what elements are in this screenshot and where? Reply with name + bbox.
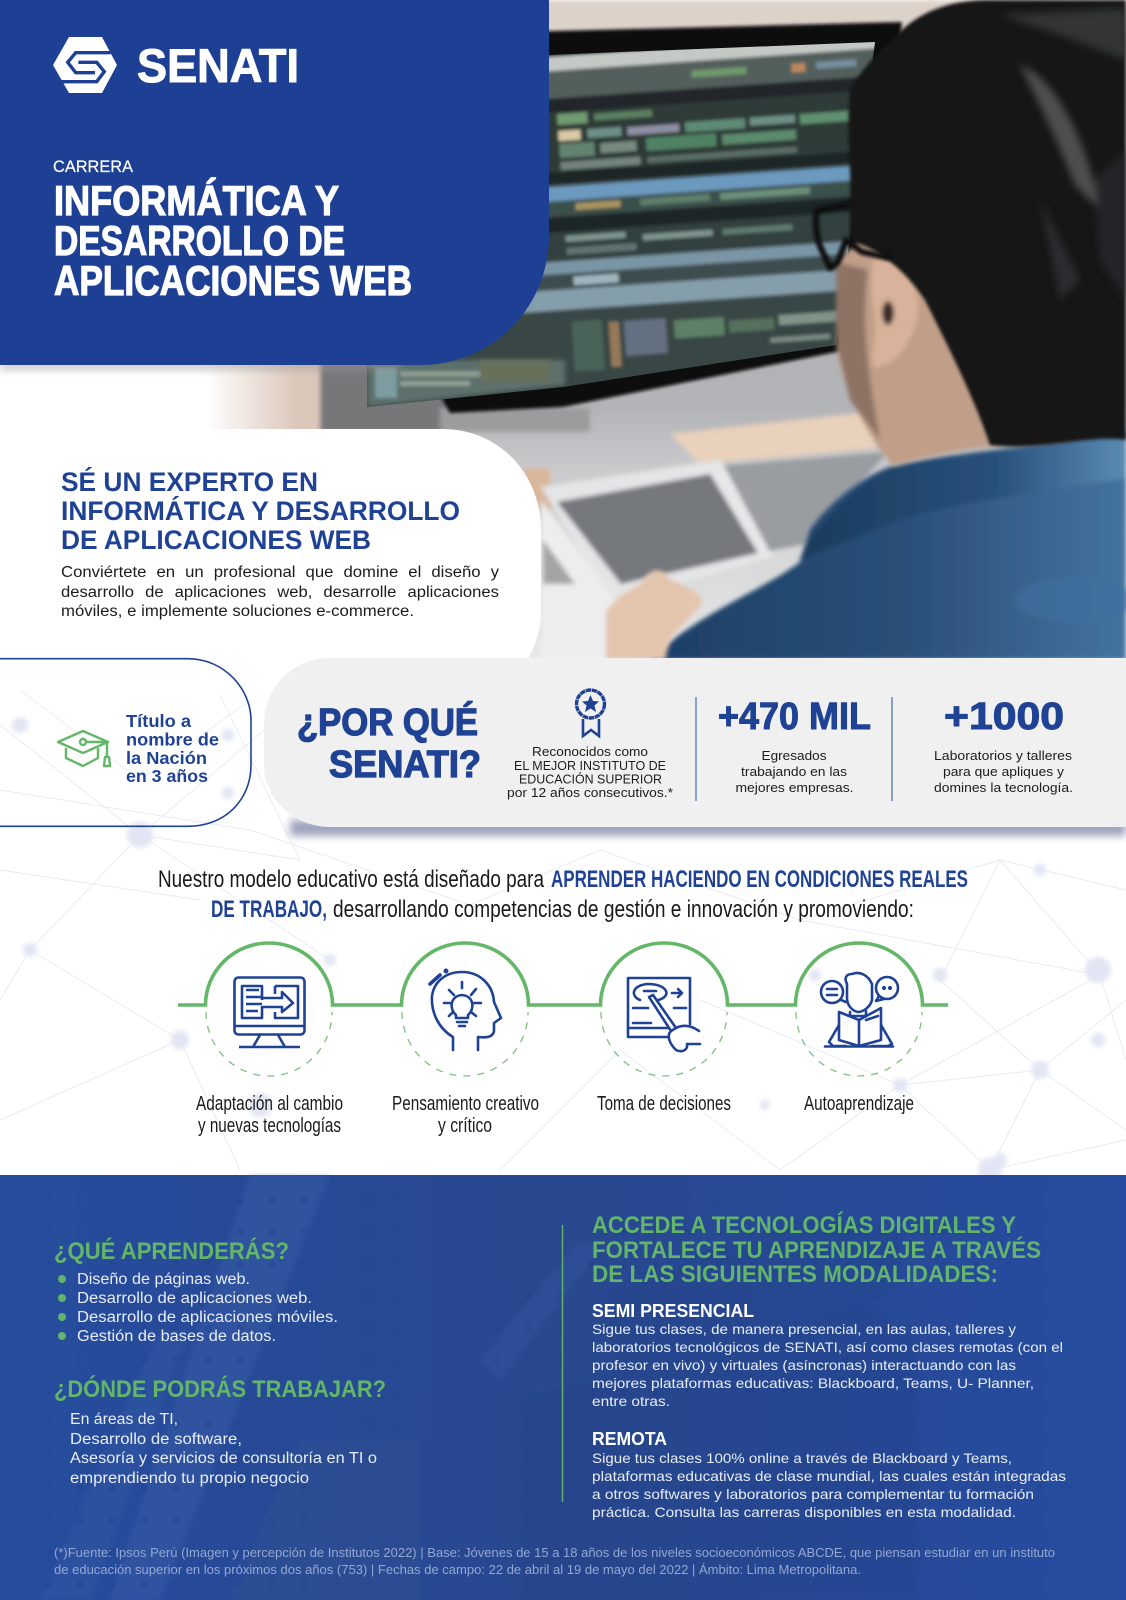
- credential text: la Nación: [126, 748, 207, 768]
- why heading: [297, 700, 481, 786]
- title: APLICACIONES WEB: [54, 257, 412, 304]
- modality: remota: [592, 1429, 1066, 1520]
- stat: labs: domines la tecnología.: [934, 780, 1073, 795]
- competency labels: Pensamiento creativo: [392, 1093, 539, 1115]
- modality: remota: plataformas educativas de clase mundial, las cuales están integradas: [592, 1468, 1066, 1484]
- intro paragraph: desarrollo de aplicaciones web, desarrolle aplicaciones: [61, 584, 499, 601]
- stat: graduates: mejores empresas.: [736, 780, 854, 795]
- stat: graduates: Egresados: [762, 748, 827, 763]
- intro paragraph: Conviértete en un profesional que domine el diseño y: [61, 564, 499, 581]
- intro paragraph: móviles, e implemente soluciones e-commerce.: [61, 603, 414, 620]
- modality: semi presencial: SEMI PRESENCIAL: [592, 1301, 754, 1321]
- list: what you learn: Gestión de bases de datos.: [77, 1328, 276, 1345]
- icon: graduation cap: [58, 731, 110, 766]
- logo: SENATI: [53, 37, 299, 93]
- heading: what you learn: ¿QUÉ APRENDERÁS?: [54, 1237, 289, 1265]
- heading: modalities: DE LAS SIGUIENTES MODALIDADES:: [592, 1261, 998, 1288]
- modality: semi presencial: [592, 1301, 1063, 1409]
- competency labels: y nuevas tecnologías: [198, 1115, 341, 1137]
- educational model text: [158, 866, 968, 923]
- label: carrera: CARRERA: [53, 157, 134, 176]
- footnote: [54, 1546, 1055, 1577]
- credential text: Título a: [126, 711, 191, 731]
- stat: best institute: EDUCACIÓN SUPERIOR: [519, 772, 662, 786]
- man's hair: [849, 0, 1126, 447]
- modality: remota: a otros softwares y laboratorios para complementar tu formación: [592, 1486, 1034, 1502]
- logo: SENATI: SENATI: [137, 39, 299, 92]
- heading: modalities: [592, 1211, 1041, 1288]
- panel: why senati: [264, 658, 1126, 827]
- stat: graduates: +470 MIL: [718, 696, 871, 738]
- educational model text: desarrollando competencias de gestión e innovación y promoviendo:: [333, 896, 914, 923]
- stat: best institute: [507, 745, 673, 800]
- modality: semi presencial: Sigue tus clases, de manera presencial, en las aulas, talleres y: [592, 1321, 1016, 1337]
- heading: modalities: FORTALECE TU APRENDIZAJE A TRAVÉS: [592, 1236, 1041, 1264]
- competency labels: Adaptación al cambio: [196, 1093, 343, 1115]
- credential text: en 3 años: [126, 766, 208, 786]
- panel: header: [0, 0, 549, 365]
- title: INFORMÁTICA Y: [54, 177, 339, 224]
- footnote: de educación superior en los próximos dos años (753) | Fechas de campo: 22 de abril al 19 de mayo del 2022 | Ámbito: Lima Metropolitana.: [54, 1562, 861, 1577]
- credential text: [126, 711, 219, 786]
- panel: title credential: [0, 659, 251, 826]
- icon: person reading with speech bubbles: [821, 973, 898, 1046]
- text: where you work: [70, 1411, 377, 1487]
- modality: remota: REMOTA: [592, 1429, 667, 1449]
- competency labels: Autoaprendizaje: [804, 1093, 914, 1115]
- footnote: (*)Fuente: Ipsos Perú (Imagen y percepción de Institutos 2022) | Base: Jóvenes de 15 a 18 años de los niveles socioeconómicos ABCDE, que piensan estudiar en un instituto: [54, 1546, 1055, 1560]
- stat: graduates: [718, 696, 871, 795]
- credential text: nombre de: [126, 730, 219, 750]
- intro heading: SÉ UN EXPERTO EN: [61, 466, 318, 497]
- man's neck and face: [836, 240, 1000, 466]
- stat: best institute: EL MEJOR INSTITUTO DE: [514, 759, 666, 773]
- intro heading: DE APLICACIONES WEB: [61, 525, 371, 555]
- modality: semi presencial: mejores plataformas educativas: Blackboard, Teams, U- Planner,: [592, 1375, 1034, 1391]
- text: where you work: Desarrollo de software,: [70, 1431, 242, 1448]
- stat: labs: Laboratorios y talleres: [934, 748, 1073, 763]
- stat: best institute: por 12 años consecutivos.*: [507, 786, 673, 800]
- text: where you work: En áreas de TI,: [70, 1411, 178, 1428]
- why heading: ¿POR QUÉ: [297, 700, 478, 744]
- educational model text: Nuestro modelo educativo está diseñado para: [158, 866, 545, 893]
- icon: medal: [576, 690, 604, 736]
- intro heading: INFORMÁTICA Y DESARROLLO: [61, 495, 460, 526]
- list: what you learn: Diseño de páginas web.: [77, 1271, 250, 1288]
- text: where you work: emprendiendo tu propio negocio: [70, 1470, 309, 1487]
- hero photo: developer at monitor: [200, 0, 1126, 660]
- glasses: [816, 204, 890, 268]
- stat: labs: para que apliques y: [943, 764, 1065, 779]
- list: what you learn: Desarrollo de aplicaciones móviles.: [77, 1309, 338, 1326]
- icon: decision board with pointer: [628, 978, 700, 1051]
- icon: head with lightbulb: [430, 970, 501, 1050]
- modality: semi presencial: entre otras.: [592, 1393, 670, 1409]
- building texture: [40, 1175, 920, 1600]
- stat: labs: [934, 696, 1073, 795]
- list: what you learn: Desarrollo de aplicaciones web.: [77, 1290, 312, 1307]
- heading: where you work: ¿DÓNDE PODRÁS TRABAJAR?: [54, 1375, 386, 1403]
- hand on keyboard: [606, 570, 702, 660]
- modality: semi presencial: profesor en vivo) y virtuales (asíncronas) interactuando con las: [592, 1357, 1016, 1373]
- competency labels: [196, 1093, 914, 1137]
- modality: semi presencial: laboratorios tecnológicos de SENATI, así como clases remotas (con el: [592, 1339, 1063, 1355]
- icon: monitor with arrow: [234, 978, 304, 1047]
- background network pattern: [0, 690, 1126, 1170]
- list: what you learn: [58, 1271, 338, 1345]
- stat: best institute: Reconocidos como: [532, 745, 648, 759]
- header panel shadow: [0, 362, 400, 370]
- title: DESARROLLO DE: [54, 217, 345, 264]
- background network nodes: [12, 717, 1111, 1182]
- modality: remota: práctica. Consulta las carreras disponibles en esta modalidad.: [592, 1504, 1016, 1520]
- competency labels: Toma de decisiones: [597, 1093, 731, 1115]
- educational model text: APRENDER HACIENDO EN CONDICIONES REALES: [551, 866, 968, 893]
- title: [54, 177, 412, 304]
- why panel shadow: [290, 820, 1126, 836]
- monitor frame: [440, 22, 902, 413]
- stat: labs: +1000: [944, 696, 1064, 738]
- text: where you work: Asesoría y servicios de consultoría en TI o: [70, 1450, 377, 1467]
- intro paragraph: [61, 564, 499, 620]
- competency labels: y crítico: [438, 1115, 492, 1137]
- stat: graduates: trabajando en las: [741, 764, 848, 779]
- why heading: SENATI?: [329, 744, 481, 786]
- panel: intro: [0, 429, 541, 660]
- heading: modalities: ACCEDE A TECNOLOGÍAS DIGITALES Y: [592, 1211, 1016, 1239]
- man's shirt: [649, 430, 1126, 660]
- intro heading: [61, 466, 460, 555]
- white fade over left of photo: [206, 360, 296, 440]
- monitor screen with code: [367, 42, 875, 407]
- modality: remota: Sigue tus clases 100% online a través de Blackboard y Teams,: [592, 1450, 1012, 1466]
- panel: bottom info: [0, 1175, 1126, 1600]
- educational model text: DE TRABAJO,: [211, 896, 327, 923]
- competencies timeline: [178, 943, 948, 1076]
